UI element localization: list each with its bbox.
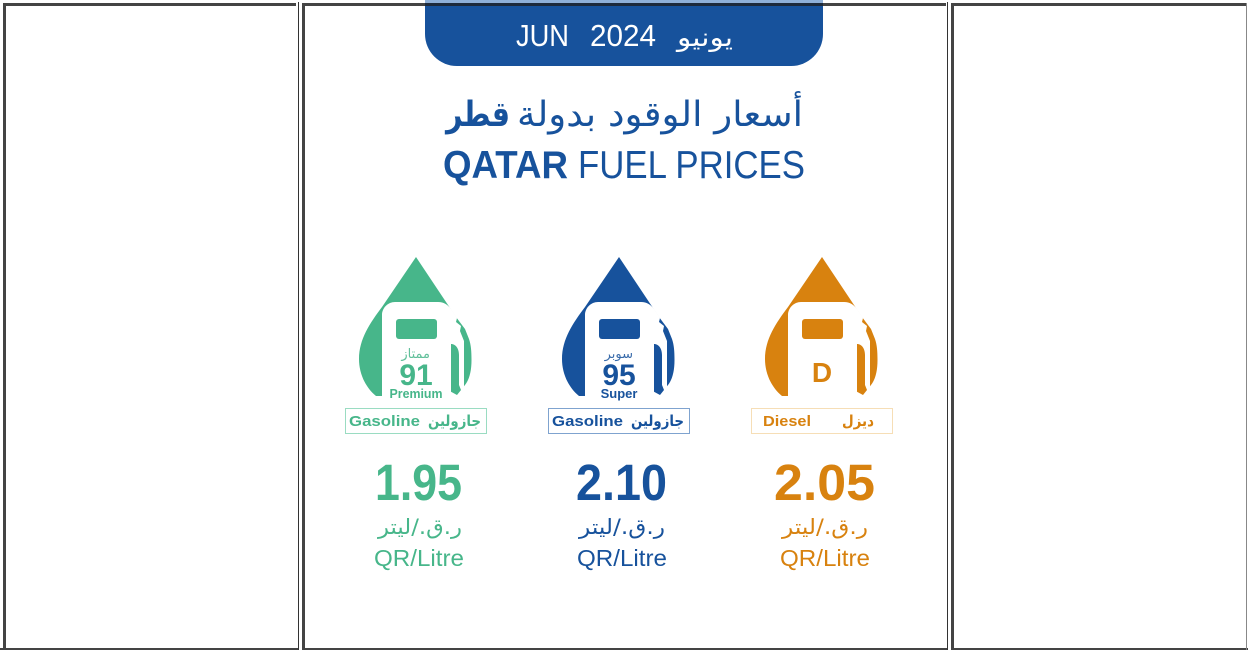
price: 2.05: 2.05 bbox=[774, 454, 875, 511]
panel: left blank frame bbox=[0, 2, 299, 650]
icon: blue fuel drop pump bbox=[562, 257, 674, 407]
unit: English: QR/Litre bbox=[577, 545, 667, 571]
title: Arabic: قطر bbox=[444, 95, 510, 135]
icon: green fuel drop pump: Premium bbox=[390, 386, 442, 401]
label: gasoline premium: جازولين bbox=[428, 412, 481, 430]
label: gasoline premium: Gasoline bbox=[349, 413, 420, 430]
label: diesel: Diesel bbox=[763, 413, 811, 430]
unit: English: QR/Litre bbox=[374, 545, 464, 571]
column: gasoline 91 premium bbox=[346, 257, 486, 571]
icon: blue fuel drop pump: سوبر bbox=[604, 347, 633, 362]
date banner: يونيو bbox=[675, 23, 733, 52]
label: gasoline super: Gasoline bbox=[552, 413, 623, 430]
label: gasoline super bbox=[548, 408, 690, 434]
date banner: JUN bbox=[516, 18, 569, 53]
label: diesel bbox=[752, 408, 892, 434]
unit: English: QR/Litre bbox=[780, 545, 870, 571]
panel: centre frame bbox=[302, 2, 948, 650]
label: gasoline premium bbox=[346, 408, 486, 434]
column: gasoline 95 super bbox=[548, 257, 690, 571]
price: 1.95: 1.95 bbox=[375, 454, 462, 511]
date banner: 2024 bbox=[590, 18, 656, 53]
panel: right blank frame bbox=[951, 3, 1248, 650]
title: Arabic bbox=[444, 91, 803, 135]
icon: green fuel drop pump: ممتاز bbox=[400, 347, 430, 362]
title: English: QATAR bbox=[443, 144, 568, 187]
date banner bbox=[425, 0, 823, 66]
unit: Arabic: ر.ق./ليتر bbox=[377, 515, 462, 539]
title: English: FUEL PRICES bbox=[578, 144, 805, 187]
column: diesel bbox=[752, 257, 892, 571]
icon: green fuel drop pump: 91 bbox=[399, 359, 433, 392]
unit: Arabic: ر.ق./ليتر bbox=[578, 515, 665, 539]
title: Arabic: أسعار الوقود بدولة bbox=[517, 91, 803, 135]
icon: blue fuel drop pump: 95 bbox=[602, 359, 636, 392]
icon: green fuel drop pump bbox=[359, 257, 472, 407]
icon: blue fuel drop pump: Super bbox=[601, 386, 637, 401]
title: English bbox=[443, 144, 805, 187]
unit: Arabic: ر.ق./ليتر bbox=[781, 515, 868, 539]
label: diesel: ديزل bbox=[842, 412, 874, 430]
icon: orange fuel drop pump bbox=[765, 257, 878, 407]
label: gasoline super: جازولين bbox=[631, 412, 684, 430]
icon: orange fuel drop pump: D bbox=[812, 357, 832, 388]
price: 2.10: 2.10 bbox=[576, 454, 667, 511]
